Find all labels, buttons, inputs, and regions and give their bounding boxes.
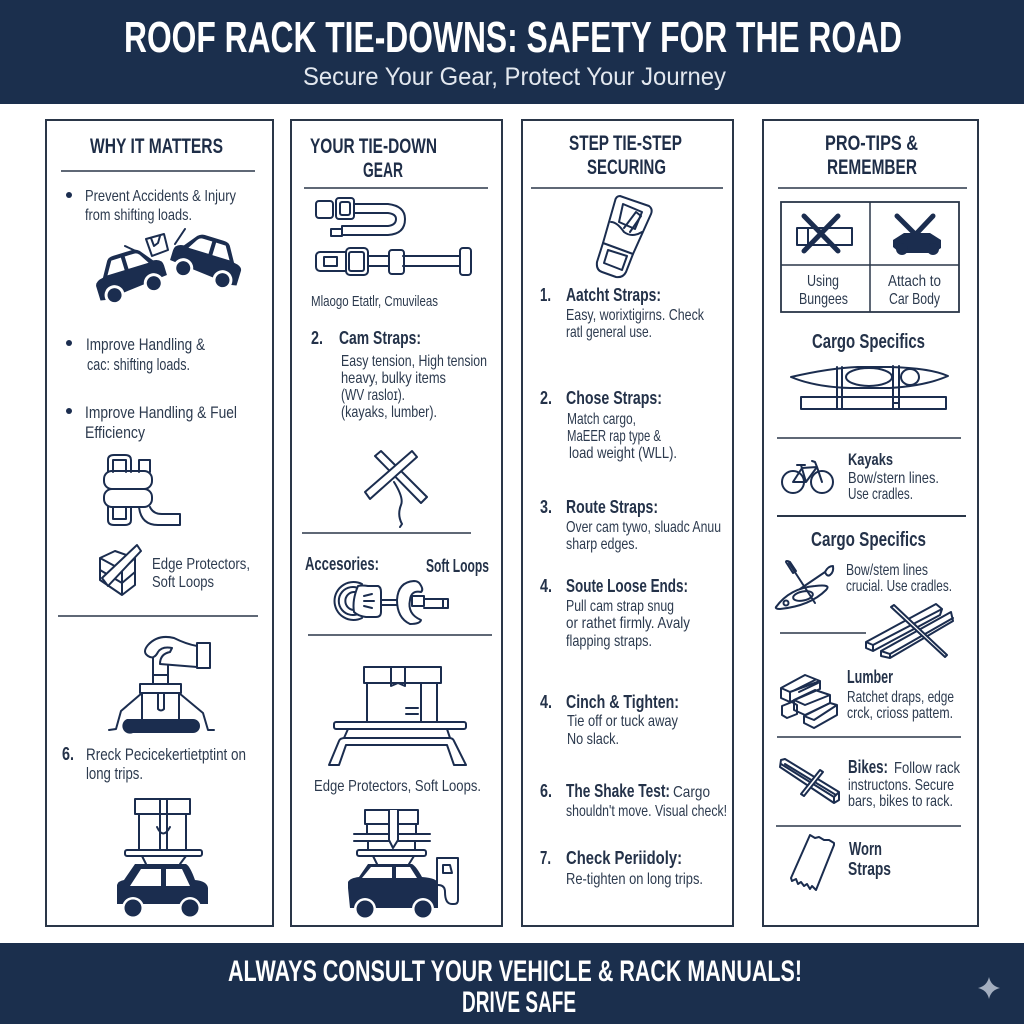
- table: things to avoid: Car Body: [889, 291, 940, 308]
- item: cam straps: (kayaks, lumber).: [341, 404, 437, 421]
- step 2: load weight (WLL).: [569, 445, 677, 462]
- step 1: Aatcht Straps:: [566, 285, 661, 305]
- step 4: flapping straps.: [566, 633, 652, 650]
- heading: your tie-down gear: YOUR TIE-DOWN: [310, 135, 437, 158]
- step 6 text: [62, 744, 246, 783]
- text: edge protectors: Edge Protectors,: [152, 556, 250, 573]
- step 6: 6.: [540, 781, 552, 801]
- table: things to avoid: [781, 202, 959, 312]
- text: bikes: [848, 757, 961, 810]
- heading: your tie-down gear: GEAR: [363, 159, 403, 182]
- icon: bike bars: [780, 759, 839, 803]
- text: lumber: Ratchet draps, edge: [847, 689, 954, 706]
- table: things to avoid: Bungees: [799, 291, 848, 308]
- icon: car with box on rack: [117, 799, 208, 919]
- heading: pro-tips and remember: PRO-TIPS &: [825, 132, 918, 155]
- bullet: prevent accidents: from shifting loads.: [85, 207, 192, 224]
- step 6: Cargo: [673, 784, 710, 801]
- bullet: prevent accidents: Prevent Accidents & Injury: [85, 188, 236, 205]
- step 3: sharp edges.: [566, 536, 638, 553]
- footer banner: ALWAYS CONSULT YOUR VEHICLE & RACK MANUALS!: [228, 955, 802, 988]
- step 1: ratl general use.: [566, 324, 652, 341]
- heading: why it matters: WHY IT MATTERS: [90, 135, 223, 158]
- step 2: Chose Straps:: [566, 388, 662, 408]
- step 5: [540, 692, 679, 748]
- icon: worn strap: [791, 835, 834, 890]
- step 5: 4.: [540, 692, 552, 712]
- step 7: [540, 848, 703, 888]
- text: worn straps: [848, 839, 891, 879]
- step 2: [540, 388, 677, 462]
- accessories labels: Accesories:: [305, 554, 379, 574]
- footer banner: DRIVE SAFE: [462, 986, 576, 1019]
- bullet: improve handling and fuel: Improve Handling & Fuel: [85, 403, 237, 422]
- icon: no attaching to car body: [893, 216, 941, 255]
- icon: colliding cars: [89, 227, 248, 309]
- step 6 text: 6.: [62, 744, 74, 764]
- step 1: [540, 285, 705, 341]
- bullet: improve handling: cac: shifting loads.: [87, 355, 190, 374]
- text: bow and stern lines: [846, 562, 952, 595]
- subtitle: Secure Your Gear, Protect Your Journey: [303, 63, 726, 91]
- table: things to avoid: Using: [807, 273, 839, 290]
- item: cam straps: (WV rasloɪ).: [341, 387, 405, 404]
- subheading: cargo specifics: Cargo Specifics: [812, 331, 925, 353]
- item: cam straps: heavy, bulky items: [341, 370, 446, 387]
- text: lumber: crck, crioss pattem.: [847, 705, 953, 722]
- text: kayaks: Use cradles.: [848, 486, 913, 503]
- icon: lumber stack: [781, 675, 837, 728]
- accessories labels: Soft Loops: [426, 556, 489, 576]
- step 4: [540, 576, 690, 650]
- step 7: Check Periidoly:: [566, 848, 682, 868]
- step 4: 4.: [540, 576, 552, 596]
- step 1: Easy, worixtigirns. Check: [566, 307, 705, 324]
- accessories labels: [305, 554, 489, 576]
- icon: no bungees: [797, 216, 852, 251]
- icon: box on rack: [329, 667, 466, 765]
- bullet: improve handling and fuel: Efficiency: [85, 423, 145, 442]
- text: worn straps: Worn: [849, 839, 882, 859]
- bullet: improve handling: Improve Handling &: [86, 335, 206, 354]
- step 7: Re-tighten on long trips.: [566, 871, 703, 888]
- text: lumber: Lumber: [847, 667, 893, 687]
- step 4: Pull cam strap snug: [566, 598, 674, 615]
- panel: your tie-down gear: [291, 120, 502, 926]
- step 3: Over cam tywo, sluadc Anuu: [566, 519, 721, 536]
- icon: hand tightening strap: [109, 637, 214, 734]
- heading: your tie-down gear: [310, 135, 437, 182]
- heading: step tie-step securing: [569, 132, 682, 179]
- icon: kayak on rack: [791, 366, 948, 409]
- text: gear caption: Mlaogo Etatlr, Cmuvileas: [311, 293, 438, 310]
- heading: step tie-step securing: SECURING: [587, 156, 666, 179]
- text: bikes: Follow rack: [894, 760, 961, 777]
- item: cam straps: [311, 328, 487, 421]
- text: bow and stern lines: Bow/stem lines: [846, 562, 928, 579]
- icon: loaded car and charger: [348, 810, 458, 920]
- icon: crossed straps: [365, 451, 427, 527]
- step 6 text: long trips.: [86, 764, 143, 783]
- text: lumber: [847, 667, 954, 722]
- bullet: improve handling: [66, 335, 206, 374]
- step 3: Route Straps:: [566, 497, 658, 517]
- step 6: shouldn't move. Visual check!: [566, 803, 727, 820]
- icon: accessories: [335, 581, 448, 624]
- panel: step by step securing: [522, 120, 733, 926]
- step 2: MaEER rap type &: [567, 428, 661, 445]
- heading: pro-tips and remember: [825, 132, 918, 179]
- step 6: The Shake Test:: [566, 781, 670, 801]
- header banner: [0, 0, 1024, 104]
- text: bikes: instructons. Secure: [848, 777, 954, 794]
- item: cam straps: Easy tension, High tension: [341, 353, 487, 370]
- text: worn straps: Straps: [848, 859, 891, 879]
- text: edge protectors: [152, 556, 250, 591]
- step 3: [540, 497, 721, 553]
- table: things to avoid: Attach to: [888, 273, 941, 290]
- step 6: [540, 781, 727, 820]
- text: bow and stern lines: crucial. Use cradles.: [846, 578, 952, 595]
- text: edge protectors: Soft Loops: [152, 574, 214, 591]
- panel: pro-tips and remember: [763, 120, 978, 926]
- icon: sparkle: [978, 977, 1000, 999]
- step 3: 3.: [540, 497, 552, 517]
- text: kayaks: [848, 450, 939, 503]
- subheading: cargo specifics second: Cargo Specifics: [811, 529, 926, 551]
- item: cam straps: 2.: [311, 328, 323, 348]
- step 6 text: Rreck Pecicekertietptint on: [86, 745, 246, 764]
- text: bikes: bars, bikes to rack.: [848, 793, 953, 810]
- step 1: 1.: [540, 285, 551, 305]
- step 7: 7.: [540, 848, 551, 868]
- text: edge protectors and soft loops: Edge Protectors, Soft Loops.: [314, 778, 481, 795]
- step 2: Match cargo,: [567, 411, 636, 428]
- heading: pro-tips and remember: REMEMBER: [827, 156, 917, 179]
- text: kayaks: Kayaks: [848, 450, 893, 469]
- icon: lumber with strap: [866, 604, 953, 658]
- icon: cam strap: [316, 198, 471, 275]
- bullet: prevent accidents: [66, 188, 236, 224]
- panel: why it matters: [46, 120, 273, 926]
- text: bikes: Bikes:: [848, 757, 888, 777]
- icon: edge protector: [100, 545, 141, 595]
- footer banner: [0, 943, 1024, 1024]
- icon: buckle: [597, 196, 652, 277]
- step 4: or rathet firmly. Avaly: [566, 615, 690, 632]
- text: kayaks: Bow/stern lines.: [848, 470, 939, 487]
- heading: step tie-step securing: STEP TIE-STEP: [569, 132, 682, 155]
- icon: wrapped strap: [104, 455, 180, 525]
- icon: bicycle: [782, 461, 833, 493]
- step 5: No slack.: [567, 731, 619, 748]
- bullet: improve handling and fuel: [66, 403, 237, 442]
- step 2: 2.: [540, 388, 552, 408]
- step 5: Tie off or tuck away: [567, 713, 678, 730]
- item: cam straps: Cam Straps:: [339, 328, 421, 348]
- step 5: Cinch & Tighten:: [566, 692, 679, 712]
- step 4: Soute Loose Ends:: [566, 576, 688, 596]
- icon: kayak with paddle: [776, 561, 833, 609]
